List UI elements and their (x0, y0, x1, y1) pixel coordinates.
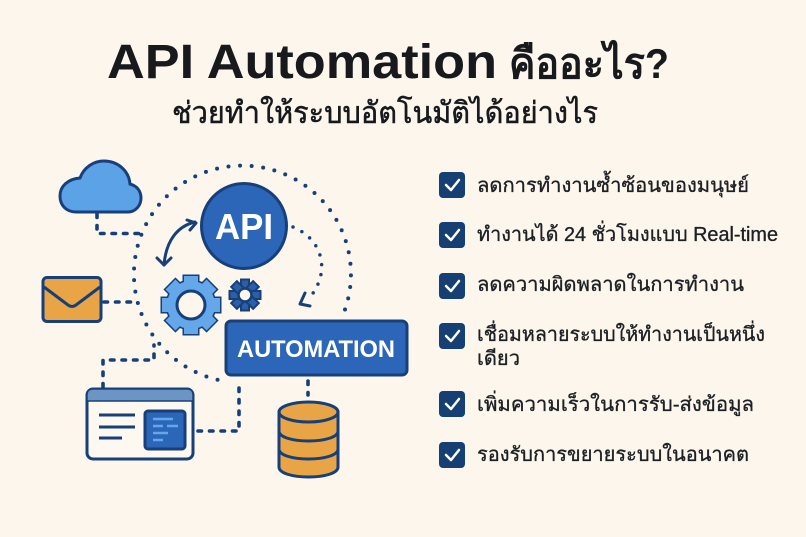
item 4 (439, 320, 765, 370)
item 4: เดียว (477, 348, 520, 370)
title: API Automation (107, 36, 497, 89)
API circle (202, 184, 286, 268)
title (107, 36, 669, 89)
icon: browser window (87, 389, 193, 459)
automation box: AUTOMATION (237, 336, 395, 363)
automation box (226, 321, 407, 375)
icon: large gear (162, 276, 220, 334)
subtitle: ช่วยทำให้ระบบอัตโนมัติได้อย่างไร (172, 95, 598, 130)
item 2: ทำงานได้ 24 ชั่วโมงแบบ Real-time (477, 220, 778, 246)
item 2 (439, 220, 778, 248)
icon: database (279, 402, 338, 477)
arrow: two-way between API and gears (157, 220, 196, 265)
item 3: ลดความผิดพลาดในการทำงาน (477, 273, 744, 296)
item 1: ลดการทำงานซ้ำซ้อนของมนุษย์ (477, 171, 749, 198)
item 6: รองรับการขยายระบบในอนาคต (477, 443, 749, 466)
item 4: เชื่อมหลายระบบให้ทำงานเป็นหนึ่ง (477, 320, 765, 346)
icon: cloud (60, 161, 141, 212)
icon: envelope (43, 278, 101, 322)
icon: small gear (230, 280, 260, 310)
API circle: API (215, 206, 273, 247)
diagram: dotted connectors (97, 166, 351, 431)
checklist (439, 171, 778, 468)
item 5: เพิ่มความเร็วในการรับ-ส่งข้อมูล (477, 390, 754, 417)
title: คืออะไร? (509, 39, 669, 87)
arrow: API to automation (293, 227, 322, 306)
